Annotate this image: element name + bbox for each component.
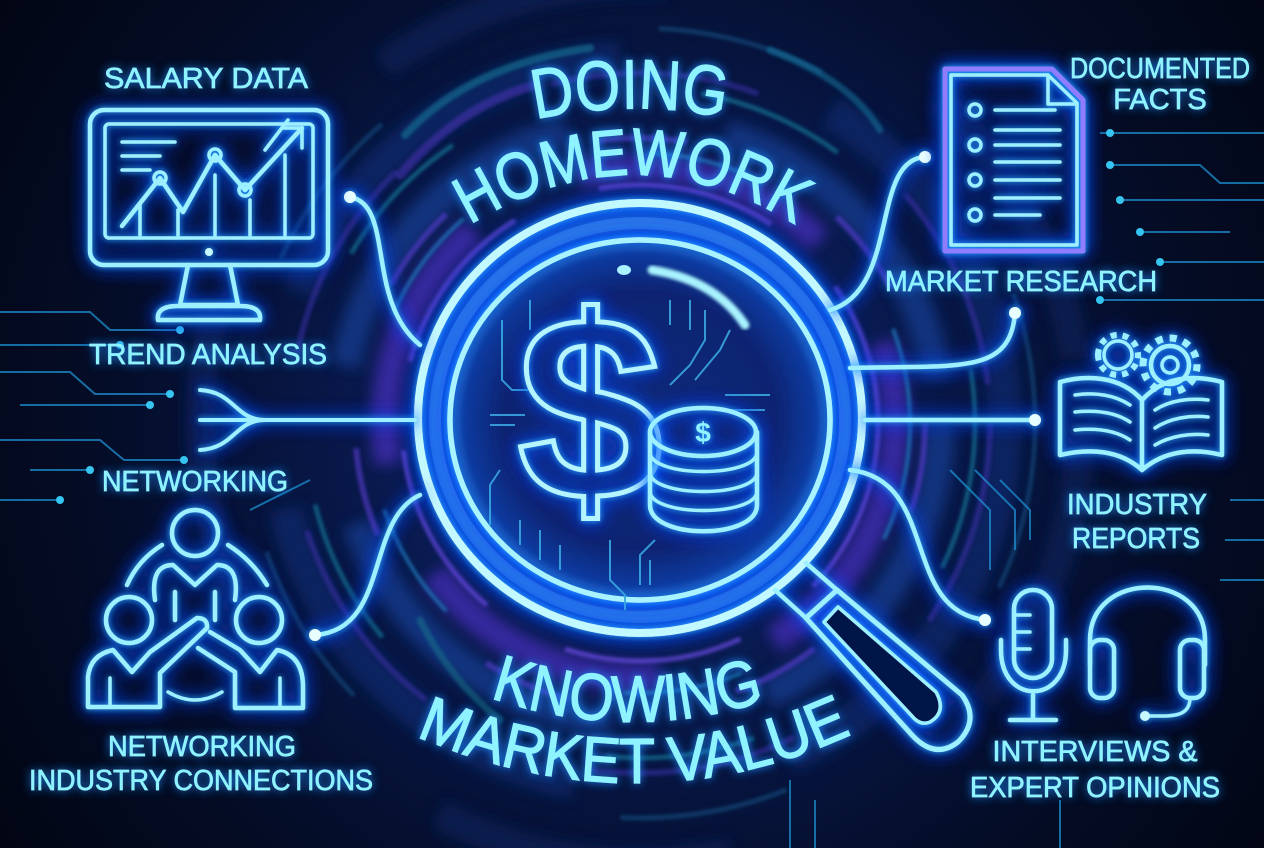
icon: coin stack: $: [695, 417, 711, 448]
icon: microphone and headset: [1001, 588, 1205, 721]
title: doing homework: [447, 54, 818, 228]
label: networking industry connections: INDUSTRY CONNECTIONS: [29, 765, 373, 797]
magnifier handle: [775, 563, 970, 750]
icon: salary monitor: [90, 110, 328, 320]
label: industry reports: INDUSTRY: [1067, 489, 1207, 521]
connector lines: [200, 151, 1041, 641]
icon: document: [945, 69, 1083, 251]
title: knowing market value: KNOWING: [488, 651, 766, 729]
label: interviews and expert opinions: INTERVIEWS &: [992, 736, 1198, 768]
icon: coin stack: [650, 408, 757, 531]
title: knowing market value: MARKET VALUE: [414, 690, 856, 790]
lens glint: [652, 270, 745, 325]
lens circuit detail: [490, 300, 770, 610]
icon: networking people: [88, 510, 303, 708]
icon: book and gears: [1060, 335, 1222, 470]
title: doing homework: HOMEWORK: [447, 122, 818, 228]
label: trend analysis: TREND ANALYSIS: [89, 339, 327, 371]
label: industry reports: REPORTS: [1072, 523, 1200, 555]
label: salary data: SALARY DATA: [104, 63, 309, 95]
label: interviews and expert opinions: EXPERT OPINIONS: [970, 772, 1220, 804]
magnifying glass: [418, 203, 970, 750]
label: networking industry connections: NETWORKING: [108, 731, 296, 763]
icon: dollar sign: $: [517, 262, 663, 555]
label: documented facts: FACTS: [1113, 84, 1207, 116]
title: doing homework: DOING: [526, 54, 731, 124]
label: networking: NETWORKING: [102, 466, 288, 498]
label: market research: MARKET RESEARCH: [885, 266, 1157, 298]
